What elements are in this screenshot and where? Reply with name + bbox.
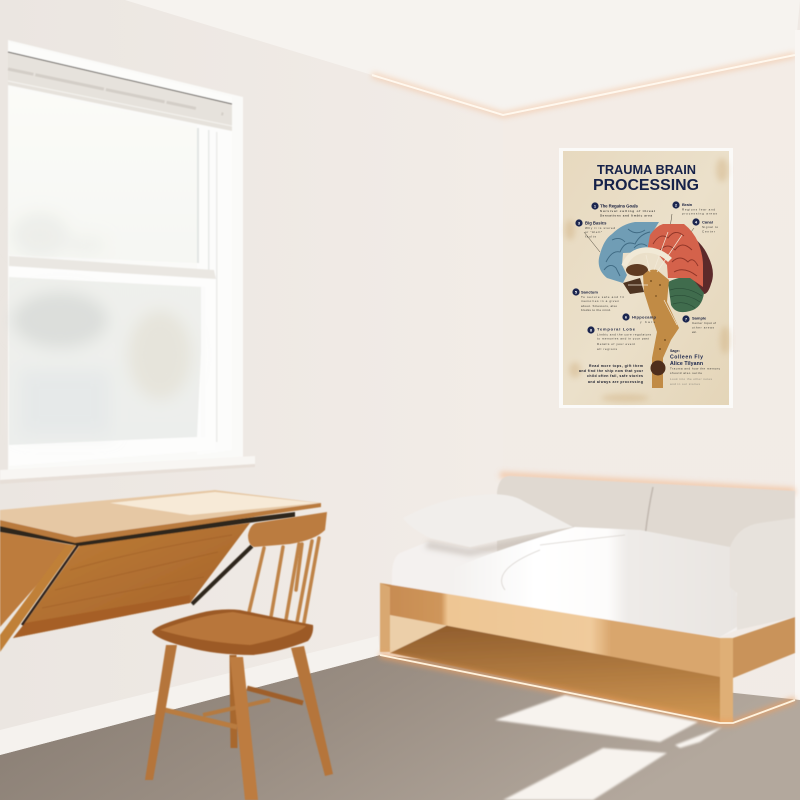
label: Canal: Center <box>702 230 715 234</box>
closing note: and always are processing <box>588 380 643 384</box>
label: The Regains Goals: 1 <box>594 204 597 209</box>
right wall column <box>795 30 800 705</box>
lower pane <box>9 277 204 445</box>
green cerebellum <box>668 277 704 312</box>
chair spindles <box>242 538 319 642</box>
label: Sanctum: Sanctum <box>581 290 598 294</box>
window <box>0 40 255 484</box>
label: Temporal Lobe: to memories and in your past <box>597 336 649 340</box>
desk <box>0 490 321 652</box>
trees seen in lower pane <box>12 292 192 435</box>
chair back rail <box>248 512 327 547</box>
title: PROCESSING <box>593 177 699 194</box>
label: Sample: Center Input of <box>692 321 716 325</box>
label: The Regains Goals: Sensations and limbic area <box>600 214 652 218</box>
floor sunlight patches <box>495 695 722 800</box>
armrest <box>730 518 795 630</box>
label: Sample <box>682 315 716 334</box>
desk left triangle panel <box>0 532 72 627</box>
closing note: child often fail, safe stories <box>587 374 643 378</box>
left wall <box>0 0 505 800</box>
floor <box>0 655 800 800</box>
chair back legs and stretchers <box>165 655 303 748</box>
right wall <box>503 55 800 800</box>
label: Big Basics: faults <box>585 234 596 238</box>
label: The Regains Goals: Survival calling of threat <box>600 209 655 213</box>
desk strut <box>0 545 76 652</box>
label: Sanctum: blocks to the mind. <box>581 308 611 312</box>
title: TRAUMA BRAIN <box>597 163 696 177</box>
blue lobe <box>599 222 659 283</box>
desk top <box>0 490 321 537</box>
wood shade beneath <box>388 612 456 654</box>
label: Brain <box>672 201 718 216</box>
leader lines <box>584 214 694 252</box>
label: Big Basics <box>575 219 615 238</box>
desk underside panel <box>13 523 250 638</box>
label: Sanctum: 5 <box>575 290 578 295</box>
label: Sanctum <box>572 288 624 312</box>
bed <box>380 472 795 723</box>
desk gap <box>0 512 295 546</box>
author credit: Trauma and how the memory <box>670 366 720 370</box>
bed left post <box>380 583 390 652</box>
label: Hippocampus: y bars <box>640 320 656 324</box>
maroon lobe <box>686 232 713 294</box>
author credit: Look into the other notes <box>670 377 712 381</box>
bed front rail <box>380 583 720 677</box>
author credit: Sage: <box>670 349 680 353</box>
chair front legs <box>145 645 177 780</box>
upper pane <box>9 87 197 263</box>
brain stem nodule <box>650 360 666 376</box>
label: Sample: other areas <box>692 326 714 330</box>
ceiling <box>125 0 800 115</box>
pillow <box>403 494 573 547</box>
closing note <box>579 364 644 384</box>
lower dark lobe <box>623 278 644 294</box>
label: Temporal Lobe: Details of your event <box>597 342 635 346</box>
author credit: and in our stories <box>670 382 700 386</box>
pillow shadow <box>425 529 575 556</box>
bed right post <box>720 638 733 723</box>
label: Temporal Lobe: Temporal Lobe <box>597 326 636 332</box>
label: Brain: processing areas <box>682 212 718 216</box>
stem lines <box>628 232 682 325</box>
headboard light <box>500 472 795 495</box>
label: Brain: 2 <box>675 203 678 208</box>
brain illustration <box>584 214 713 388</box>
closing note: Read more tops, gift them <box>589 364 643 368</box>
inner brown tissue <box>626 264 648 276</box>
author credit: should also settle <box>670 371 702 375</box>
baseboard <box>0 636 380 755</box>
shadow below bed <box>390 624 720 722</box>
paper stains <box>565 158 730 402</box>
label: Temporal Lobe: 8 <box>590 328 593 333</box>
author credit: Alice Tilyann <box>670 361 703 367</box>
label: Hippocampus <box>622 313 657 324</box>
label: Sanctum: memories in a given <box>581 299 619 303</box>
label: Temporal Lobe <box>587 326 652 351</box>
label: Sample: etc. <box>692 330 697 334</box>
corpus arc <box>624 250 670 266</box>
label: Big Basics: or "Alert" <box>585 230 602 234</box>
author credit <box>670 349 720 386</box>
label: Sample: Sample <box>692 316 707 320</box>
window blind <box>8 42 232 131</box>
trees seen in upper pane <box>12 213 107 257</box>
poster frame <box>559 148 733 408</box>
label: Hippocampus: Hippocamp <box>632 314 657 320</box>
backrest <box>497 476 795 560</box>
label: Temporal Lobe: Limbic and the core regulators <box>597 332 652 336</box>
label: Brain: Brain <box>682 202 693 207</box>
mattress <box>392 542 737 637</box>
duvet <box>450 527 737 637</box>
label: Sample: 7 <box>685 317 688 322</box>
label: Brain: Regions fear and <box>682 208 715 212</box>
label: Big Basics: 3 <box>578 221 581 226</box>
poster <box>559 148 733 408</box>
label: Canal <box>692 218 718 234</box>
label: Canal: Signal to <box>702 225 718 229</box>
window sill <box>0 456 255 480</box>
lower sash <box>9 258 216 466</box>
closing note: and find the ship now that your <box>579 369 644 373</box>
poster paper <box>563 151 729 405</box>
chair seat <box>152 609 313 655</box>
chair <box>145 512 333 800</box>
floor light strip <box>380 655 795 723</box>
bed side rail <box>733 617 795 678</box>
label: The Regains Goals <box>591 202 655 218</box>
label: Big Basics: Why it is stored <box>585 226 615 230</box>
brain stem <box>643 270 679 388</box>
label: Temporal Lobe: all regions <box>597 347 618 351</box>
label: Big Basics: Big Basics <box>585 220 607 226</box>
label: Hippocampus: 6 <box>625 315 628 320</box>
label: The Regains Goals: The Regains Goals <box>600 204 639 208</box>
label: Sanctum: about. Stressors, also <box>581 304 617 308</box>
label: Sanctum: To secure safe and fit <box>581 295 624 299</box>
red lobe <box>647 224 703 287</box>
author credit: Colleen Fly <box>670 354 703 360</box>
label: Canal: 4 <box>695 220 698 225</box>
ceiling light strip <box>372 55 795 115</box>
window reveal <box>197 125 232 455</box>
label: Canal: Canal <box>702 220 713 224</box>
desk bracket <box>192 546 252 604</box>
window outer trim <box>8 40 243 470</box>
title <box>593 163 699 194</box>
